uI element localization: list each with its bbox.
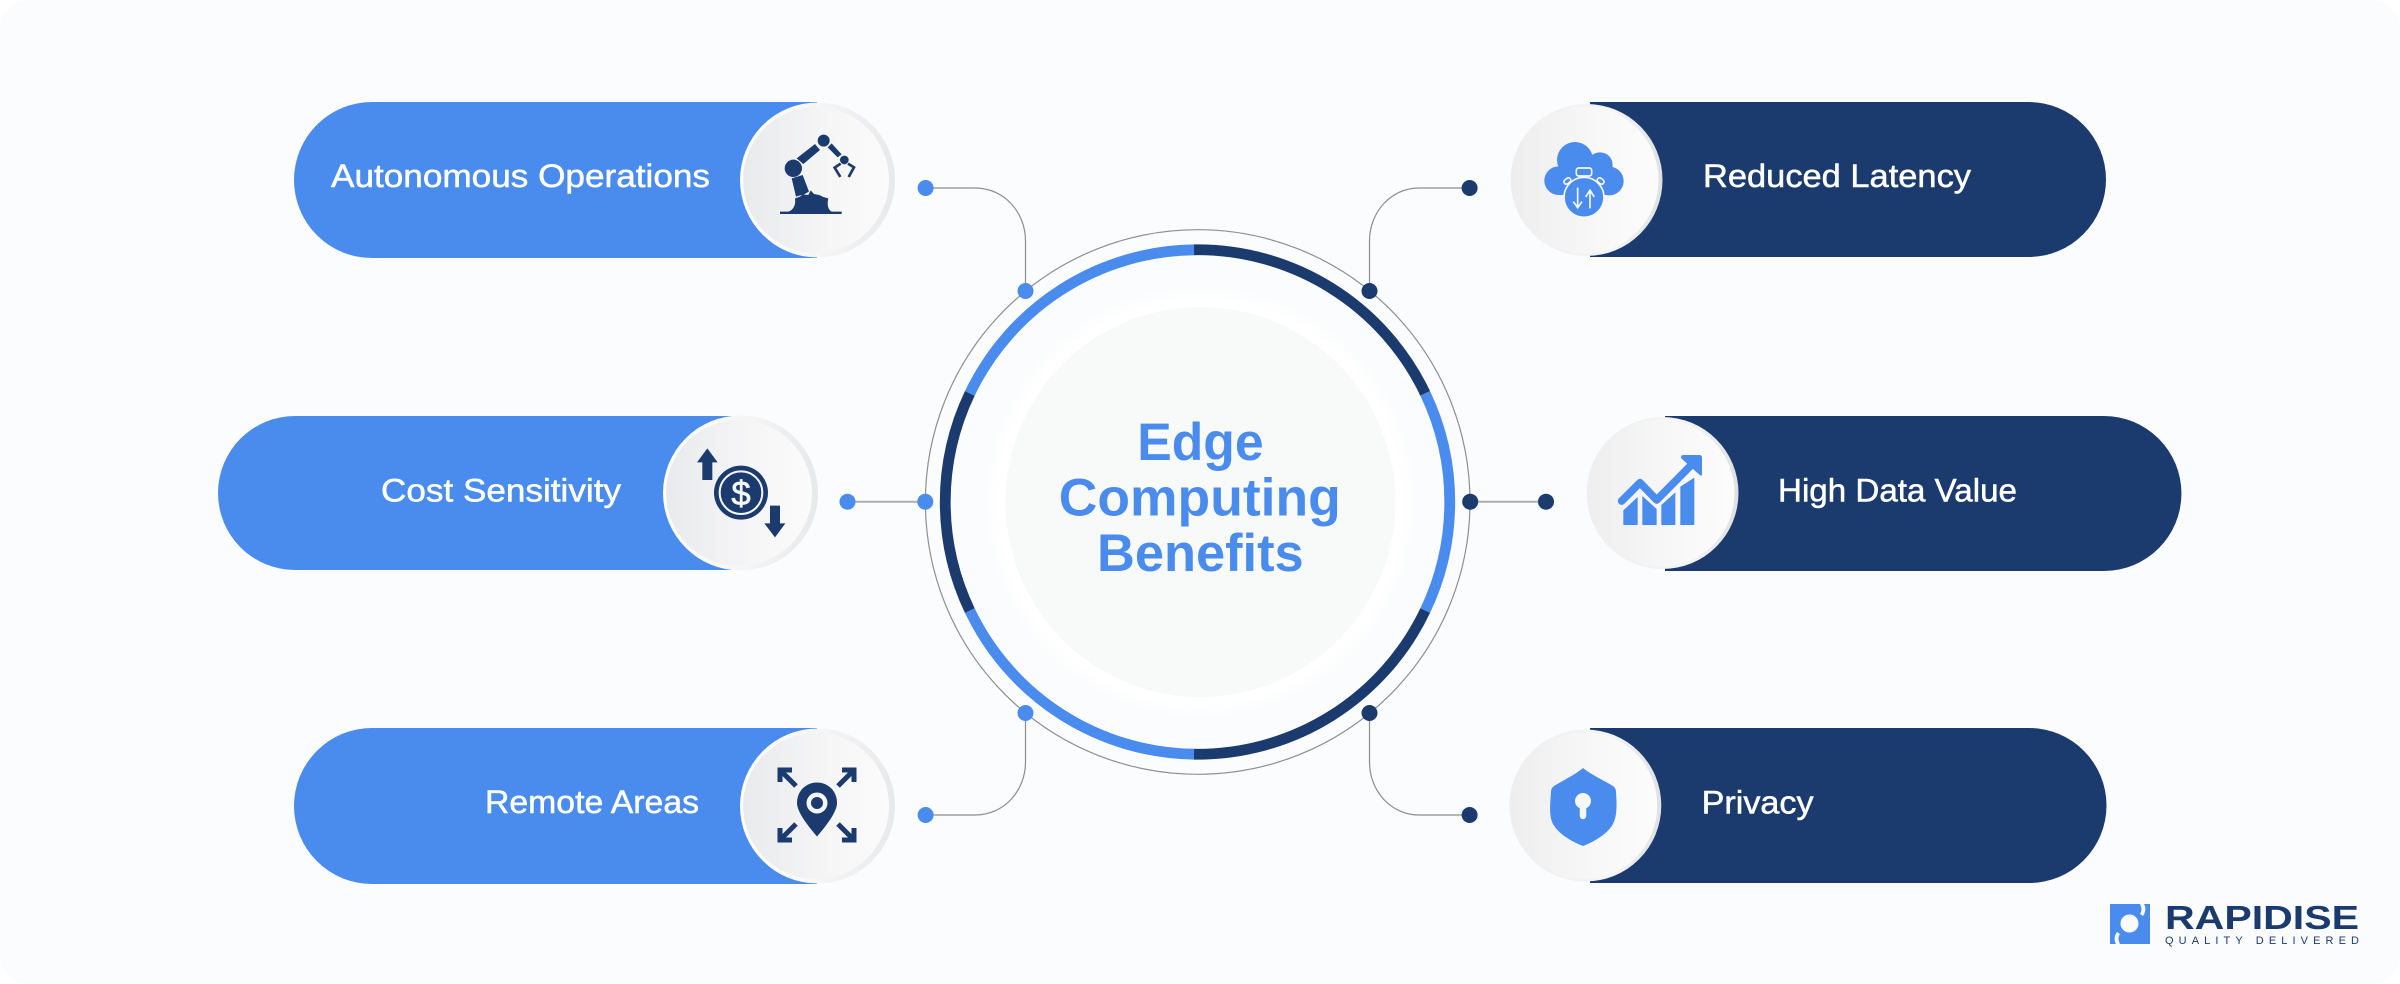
connectors: left side bbox=[840, 180, 1034, 823]
logo mark bbox=[2110, 904, 2150, 944]
connectors: right side bbox=[1362, 180, 1554, 823]
panel: Remote Areas: Remote Areas bbox=[485, 784, 699, 820]
panel: High Data Value bbox=[1586, 416, 2181, 571]
logo: Rapidise bbox=[2110, 899, 2359, 947]
icon: rising bar chart bbox=[1622, 455, 1702, 525]
outer thin ring bbox=[925, 230, 1470, 774]
panel: central hub bbox=[925, 230, 1470, 774]
title: Benefits bbox=[1097, 524, 1304, 583]
panel: Reduced Latency: Reduced Latency bbox=[1703, 158, 1971, 194]
logo tagline: QUALITY DELIVERED bbox=[2165, 935, 2359, 947]
icon: cloud with stopwatch bbox=[1544, 142, 1624, 217]
panel: Cost Sensitivity bbox=[218, 416, 818, 570]
icon: location pin with arrows bbox=[780, 770, 854, 840]
icon: dollar coin with arrows bbox=[697, 448, 785, 537]
panel: Reduced Latency bbox=[1510, 102, 2106, 257]
icon: shield with keyhole bbox=[1550, 768, 1617, 846]
title: Edge bbox=[1137, 413, 1264, 472]
title: Computing bbox=[1059, 469, 1341, 528]
panel: Remote Areas bbox=[294, 728, 895, 884]
title bbox=[1059, 413, 1341, 583]
inner disc glow bbox=[992, 293, 1410, 711]
segmented ring bbox=[945, 250, 1450, 754]
icon: robot arm bbox=[780, 135, 854, 214]
panel: Privacy bbox=[1509, 728, 2106, 883]
icon: dollar coin with arrows: $ bbox=[731, 475, 751, 513]
logo wordmark: RAPIDISE bbox=[2165, 899, 2359, 936]
panel: Privacy: Privacy bbox=[1702, 784, 1814, 820]
panel: Autonomous Operations bbox=[294, 102, 895, 258]
panel: Autonomous Operations: Autonomous Operations bbox=[331, 158, 710, 194]
panel: Cost Sensitivity: Cost Sensitivity bbox=[381, 473, 621, 509]
panel: High Data Value: High Data Value bbox=[1778, 473, 2017, 509]
inner disc bbox=[1006, 307, 1396, 697]
